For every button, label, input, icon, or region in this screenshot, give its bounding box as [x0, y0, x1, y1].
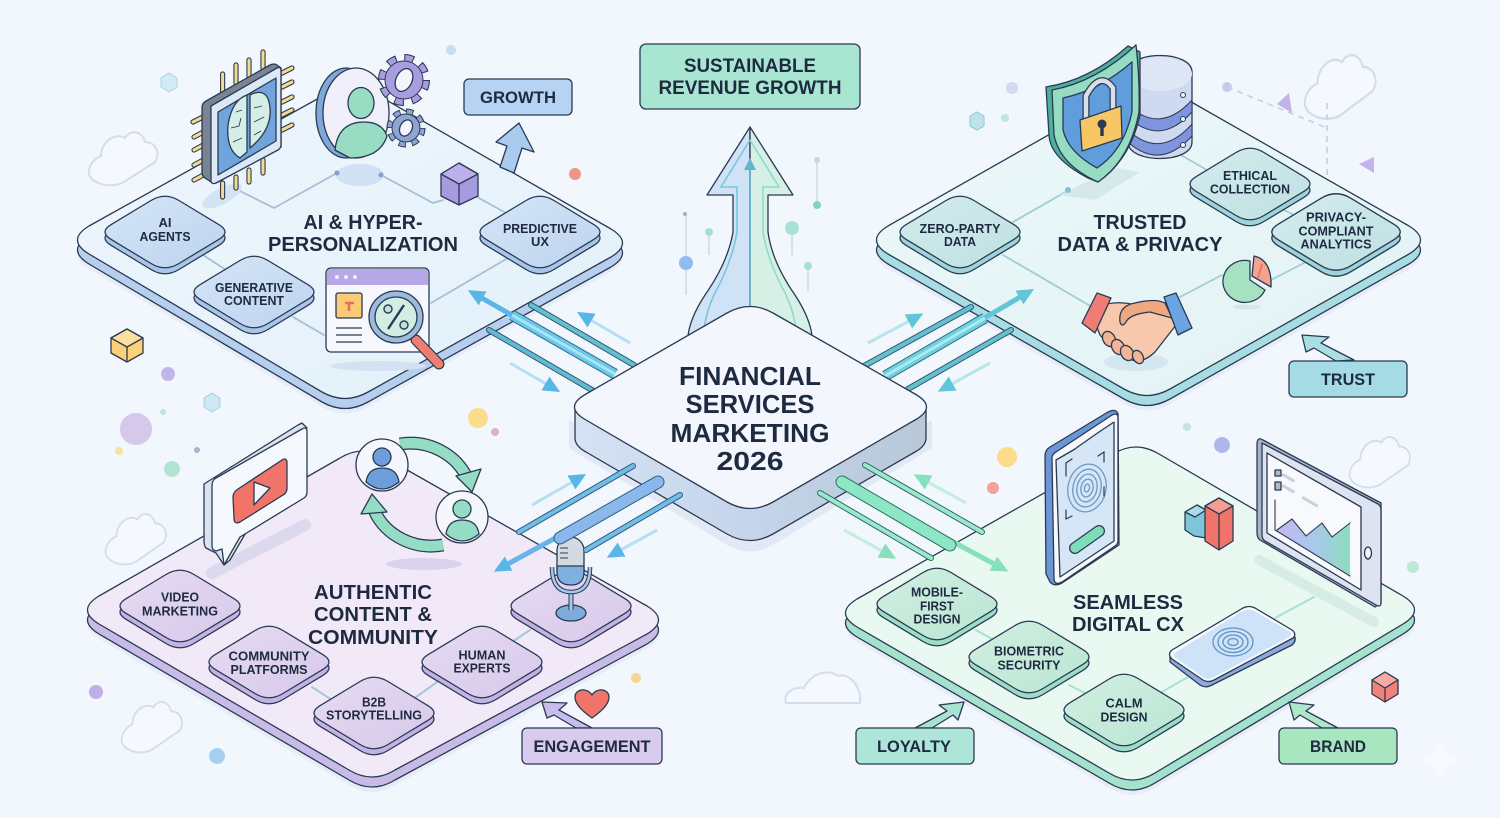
node: human experts: HUMAN	[458, 648, 506, 662]
node: predictive UX: PREDICTIVE	[503, 221, 577, 236]
icon: tablet with chart	[1257, 439, 1381, 607]
node: mobile-first design	[877, 568, 997, 646]
icon: AI chip with brain	[193, 52, 292, 197]
label: sustainable revenue growth: SUSTAINABLE	[684, 56, 816, 77]
panel: trusted data and privacy platform	[876, 45, 1420, 410]
icon: small gear	[390, 112, 422, 144]
arrow: growth	[496, 123, 534, 173]
label: engagement: ENGAGEMENT	[534, 737, 651, 756]
node: privacy-compliant analytics	[1272, 194, 1400, 276]
heading: trusted data and privacy: DATA & PRIVACY	[1058, 234, 1223, 256]
node: ethical collection	[1190, 148, 1310, 226]
node: calm design: DESIGN	[1100, 710, 1148, 724]
node: predictive UX: UX	[531, 234, 549, 249]
icon: vertical phone with fingerprint	[1045, 410, 1119, 585]
arrow: trust	[1302, 335, 1354, 361]
title: MARKETING	[670, 418, 830, 448]
label: growth: GROWTH	[480, 88, 556, 107]
node: biometric security	[969, 621, 1089, 699]
icon: pie chart	[1223, 256, 1271, 302]
node: video marketing	[120, 570, 240, 648]
connector: centre to privacy platform	[864, 296, 1022, 389]
heading: AI and hyper-personalization: AI & HYPER-	[304, 212, 422, 234]
connector lines	[976, 597, 1314, 693]
icon: person with gears	[316, 58, 426, 158]
node: human experts	[422, 626, 542, 704]
icon: microphone	[552, 537, 590, 621]
icon: community cycle	[356, 439, 488, 546]
node: generative content	[194, 256, 314, 334]
node: calm design	[1064, 674, 1184, 752]
platform top	[574, 306, 926, 508]
panel: seamless digital CX platform	[846, 410, 1414, 795]
panel: authentic content and community platform	[88, 423, 662, 792]
node: predictive UX	[480, 196, 600, 274]
icon: video speech bubble	[204, 423, 307, 565]
node: mobile-first design: FIRST	[920, 598, 954, 614]
title: FINANCIAL	[679, 361, 821, 391]
node: zero-party data	[900, 196, 1020, 274]
platform base	[78, 96, 622, 408]
connector: centre to digital CX platform	[820, 465, 996, 565]
heading: AI and hyper-personalization	[268, 212, 458, 256]
node: ethical collection: COLLECTION	[1210, 182, 1290, 196]
node: generative content: GENERATIVE	[215, 280, 293, 295]
node: generative content: CONTENT	[224, 293, 284, 308]
node: video marketing: MARKETING	[142, 604, 218, 618]
node: AI agents: AGENTS	[140, 229, 191, 244]
heading: authentic content and community: AUTHENTIC	[314, 582, 432, 604]
heading: authentic content and community: CONTENT &	[314, 604, 432, 626]
heading: AI and hyper-personalization: PERSONALIZATION	[268, 234, 458, 256]
node: privacy-compliant analytics: COMPLIANT	[1298, 224, 1374, 238]
arrow: loyalty	[915, 702, 964, 728]
node: community platforms	[209, 626, 329, 704]
node: community platforms: COMMUNITY	[228, 648, 310, 664]
platform surface	[876, 84, 1420, 396]
heading: trusted data and privacy	[1058, 212, 1223, 256]
node: privacy-compliant analytics: ANALYTICS	[1300, 236, 1372, 252]
platform surface	[88, 451, 658, 777]
label: brand	[1279, 728, 1397, 764]
connector lines	[218, 630, 530, 700]
icon: yellow cube	[111, 329, 143, 362]
title: 2026	[716, 446, 784, 476]
platform base	[846, 457, 1414, 790]
arrow: brand	[1289, 702, 1338, 728]
connector lines	[203, 173, 508, 335]
icon: bar blocks	[1185, 498, 1233, 550]
node: ethical collection: ETHICAL	[1223, 168, 1277, 183]
label: brand: BRAND	[1310, 737, 1366, 756]
platform surface	[846, 447, 1414, 780]
label: growth	[464, 79, 572, 115]
label: trust: TRUST	[1321, 370, 1376, 389]
node: mobile-first design: DESIGN	[914, 612, 960, 626]
node: microphone base	[511, 570, 631, 648]
icon: flat phone with fingerprint	[1170, 606, 1295, 687]
label: loyalty	[856, 728, 974, 764]
node: human experts: EXPERTS	[454, 660, 511, 676]
icon: browser with magnifier	[326, 268, 439, 364]
node: B2B storytelling	[314, 677, 434, 755]
icon: database	[1128, 56, 1192, 158]
label: loyalty: LOYALTY	[877, 737, 952, 756]
node: B2B storytelling: B2B	[362, 694, 386, 710]
heading: authentic content and community: COMMUNITY	[308, 627, 439, 649]
node: calm design: CALM	[1106, 696, 1142, 710]
platform side	[575, 407, 926, 540]
node: zero-party data: DATA	[944, 234, 977, 249]
node: video marketing: VIDEO	[161, 590, 199, 604]
node: mobile-first design: MOBILE-	[911, 584, 963, 600]
icon: red cube	[1372, 672, 1398, 702]
arrow: engagement	[542, 702, 592, 728]
node: B2B storytelling: STORYTELLING	[326, 708, 422, 722]
platform surface	[78, 86, 622, 398]
heading: seamless digital CX: SEAMLESS	[1073, 592, 1183, 614]
connector: centre to AI platform	[480, 297, 634, 390]
decorative risers beside big arrow	[679, 157, 821, 295]
heading: authentic content and community	[308, 582, 439, 649]
node: biometric security: BIOMETRIC	[994, 644, 1065, 658]
node: biometric security: SECURITY	[998, 658, 1061, 672]
label: sustainable revenue growth	[640, 44, 860, 109]
connector: centre to community platform	[506, 466, 680, 565]
heading: seamless digital CX	[1072, 592, 1185, 636]
centre platform: financial services marketing 2026	[569, 306, 932, 552]
title	[670, 361, 830, 476]
panel: AI and hyper-personalization platform	[78, 52, 622, 414]
big arrow: sustainable revenue growth	[688, 127, 812, 345]
label: sustainable revenue growth: REVENUE GROWTH	[658, 78, 842, 99]
platform base	[876, 94, 1420, 406]
node: AI agents: AI	[158, 215, 172, 230]
icon: purple cube	[441, 163, 478, 205]
heading: trusted data and privacy: TRUSTED	[1094, 212, 1186, 234]
platform base	[88, 461, 658, 787]
icon: heart	[575, 690, 609, 718]
icon: large gear	[382, 58, 426, 102]
node: privacy-compliant analytics: PRIVACY-	[1306, 210, 1366, 224]
label: engagement	[522, 728, 662, 764]
connector lines	[1003, 155, 1304, 307]
icon: handshake	[1082, 293, 1192, 366]
icon: shield with padlock	[1046, 45, 1140, 182]
node: AI agents	[105, 196, 225, 274]
title: SERVICES	[686, 389, 814, 419]
node: zero-party data: ZERO-PARTY	[920, 221, 1001, 236]
node: community platforms: PLATFORMS	[230, 662, 308, 677]
label: trust	[1289, 361, 1407, 397]
heading: seamless digital CX: DIGITAL CX	[1072, 614, 1185, 636]
